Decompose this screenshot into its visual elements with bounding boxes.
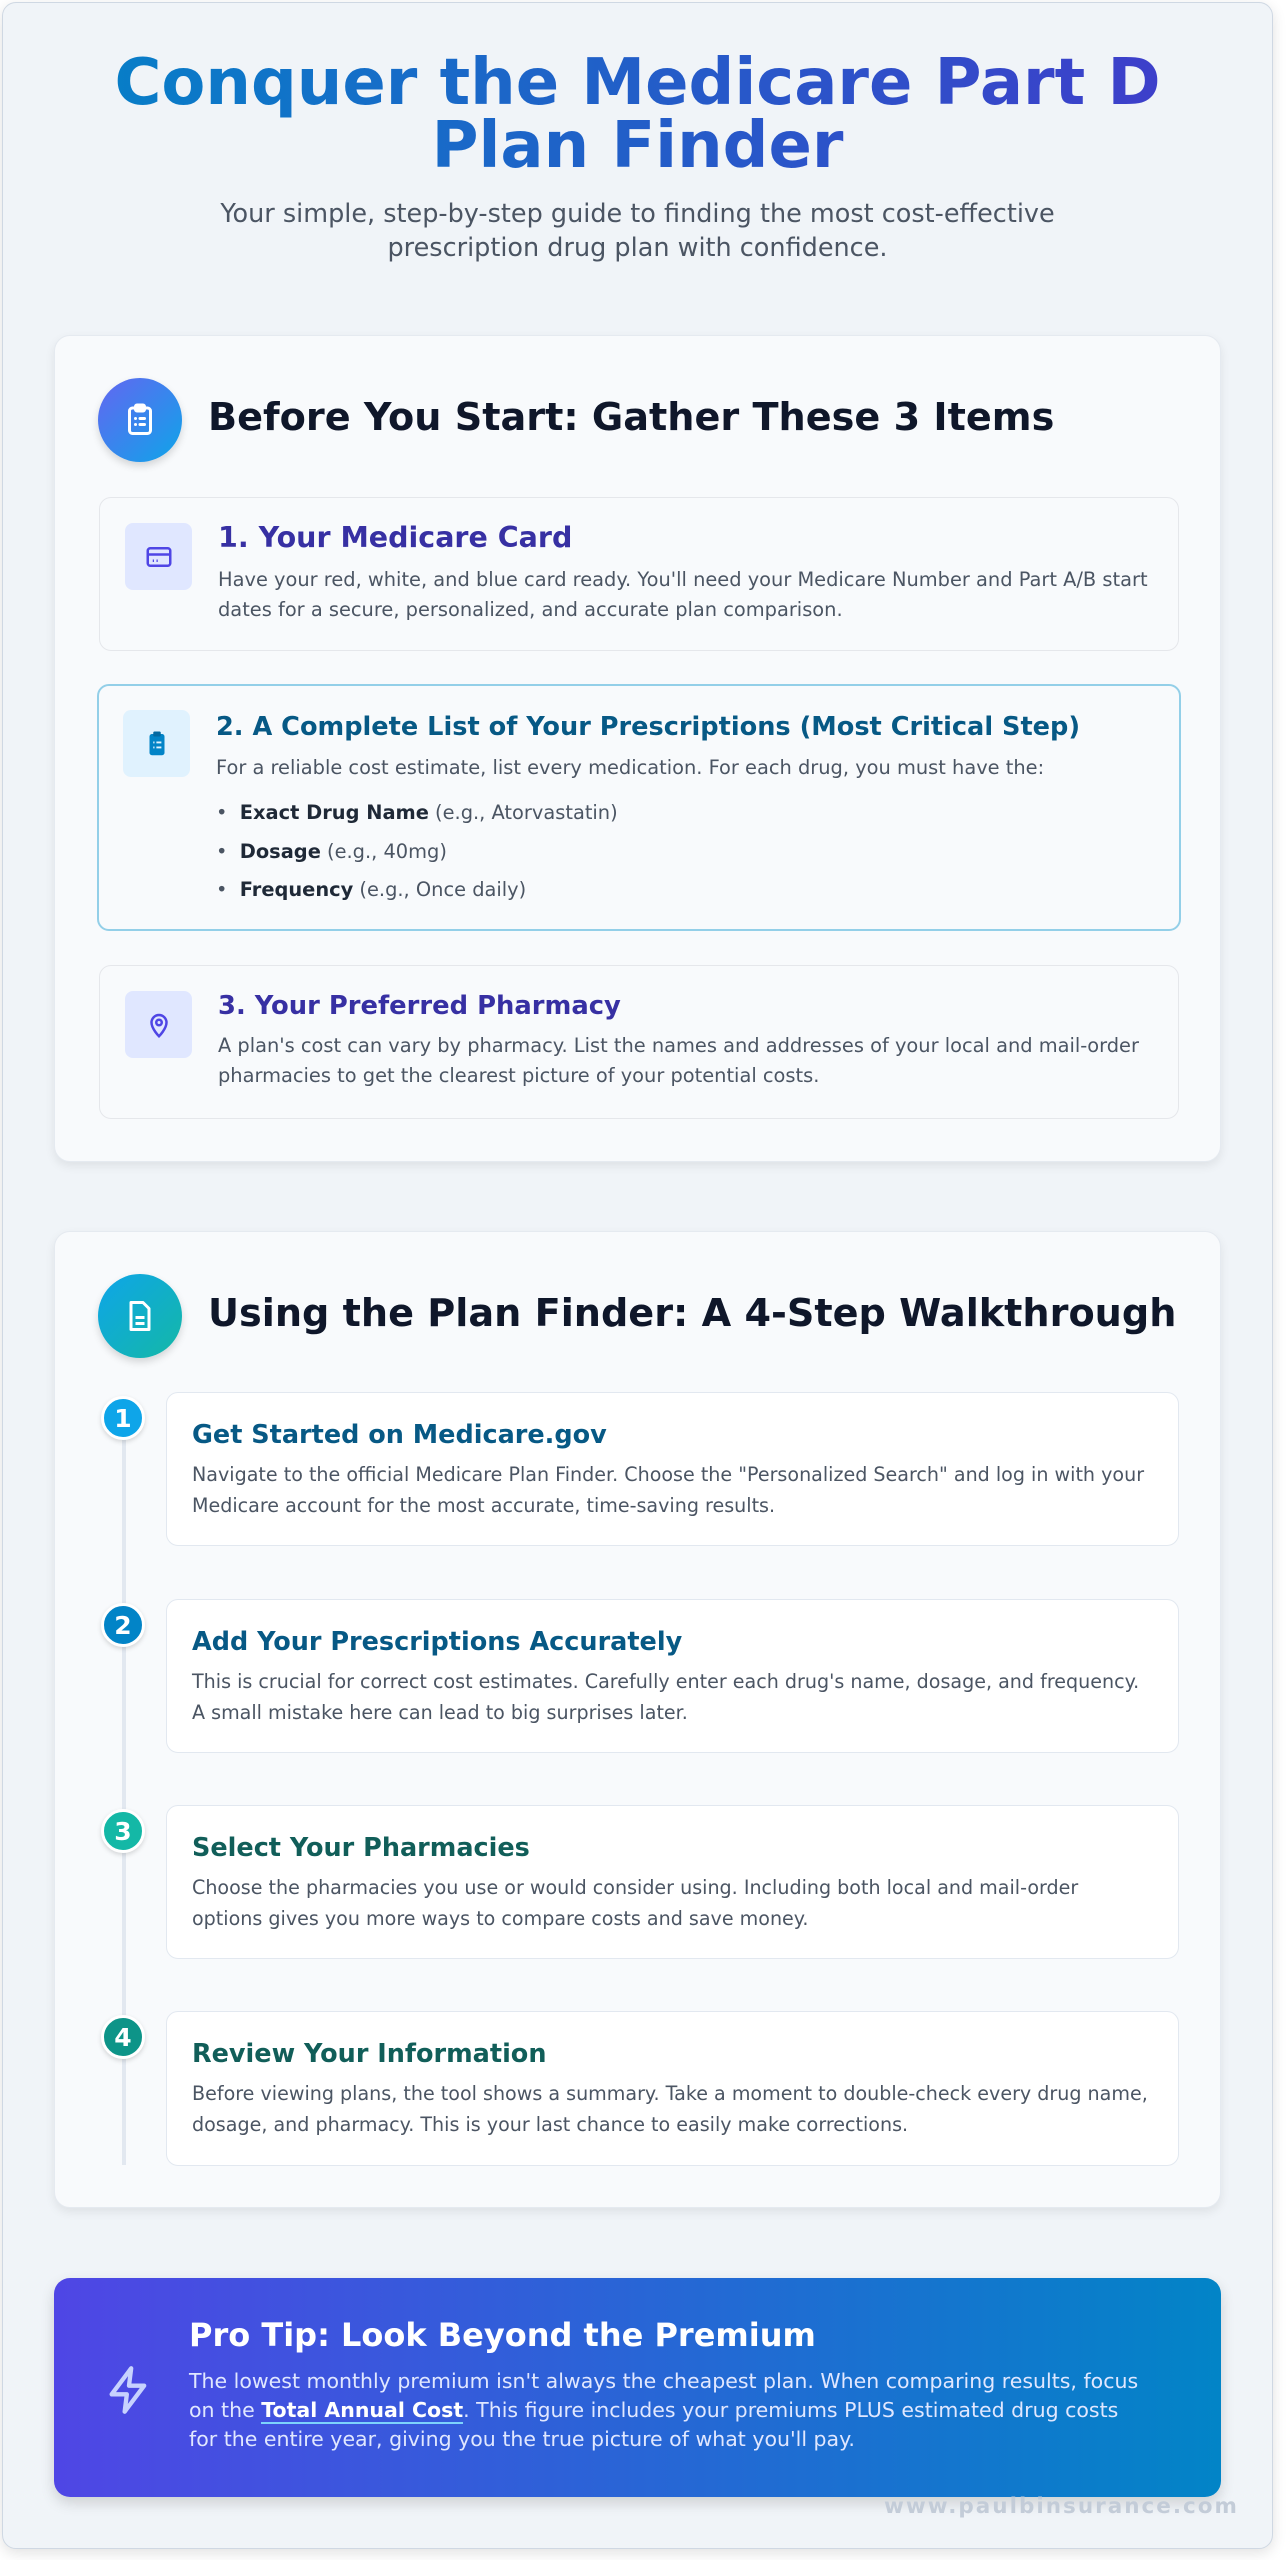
item 1: medicare card: [99, 497, 1179, 651]
item text: Have your red, white, and blue card ready. You'll need your Medicare Number and Part A/B start dates for a secure, personalized, and accurate plan comparison.: [218, 568, 1148, 621]
bullet list: • Exact Drug Name (e.g., Atorvastatin): [216, 801, 618, 824]
number badge 2: [101, 1603, 145, 1647]
step card 1: [166, 1392, 1179, 1546]
item 2: prescriptions: [97, 684, 1181, 931]
panel: 4-step walkthrough: [54, 1231, 1221, 2208]
step 4: [100, 2011, 1179, 2166]
item text: A plan's cost can vary by pharmacy. List the names and addresses of your local and mail‑order pharmacies to get the clearest picture of your potential costs.: [218, 1034, 1139, 1087]
step card 2: Add Your Prescriptions Accurately: [192, 1627, 682, 1657]
tip text: on the Total Annual Cost. This figure includes your premiums PLUS estimated drug costs: [189, 2398, 1118, 2422]
number badge 2: 2: [114, 1610, 132, 1640]
number badge 3: [101, 1809, 145, 1853]
icon: document: [98, 1274, 182, 1358]
step card 4: Review Your Information: [192, 2039, 546, 2069]
step 3: [100, 1805, 1179, 1959]
subtitle: [220, 199, 1055, 263]
step card 3: Select Your Pharmacies: [192, 1833, 530, 1863]
icon: location pin: [125, 991, 192, 1058]
heading: Before You Start: Gather These 3 Items: [208, 396, 1054, 440]
bullet list: • Dosage (e.g., 40mg): [216, 840, 447, 862]
bullet list: • Frequency (e.g., Once daily): [216, 878, 526, 901]
heading: Using the Plan Finder: A 4-Step Walkthrough: [208, 1292, 1176, 1336]
tip title: Pro Tip: Look Beyond the Premium: [189, 2316, 816, 2354]
step card 4: [166, 2011, 1179, 2166]
subtitle: Your simple, step-by-step guide to finding the most cost-effective: [220, 199, 1055, 229]
item title: 1. Your Medicare Card: [218, 521, 572, 554]
title: [0, 52, 1275, 178]
number badge 4: 4: [114, 2022, 132, 2052]
title: Plan Finder: [432, 109, 843, 183]
step card 1: Navigate to the official Medicare Plan Finder. Choose the "Personalized Search" and log in with your Medicare account for the most accurate, time-saving results.: [192, 1463, 1144, 1517]
icon: card: [125, 523, 192, 590]
tip text: for the entire year, giving you the true picture of what you'll pay.: [189, 2427, 855, 2451]
step card 2: [166, 1599, 1179, 1753]
item text: For a reliable cost estimate, list every medication. For each drug, you must have the:: [216, 756, 1044, 779]
watermark: www.paulbinsurance.com: [884, 2494, 1239, 2519]
step 2: [100, 1599, 1179, 1753]
number badge 1: 1: [114, 1404, 132, 1432]
panel: before you start: [54, 335, 1221, 1162]
step card 4: Before viewing plans, the tool shows a summary. Take a moment to double-check every drug name, dosage, and pharmacy. This is your last chance to easily make corrections.: [192, 2082, 1148, 2136]
step card 3: [166, 1805, 1179, 1959]
step 1: [100, 1392, 1179, 1546]
tip text: [188, 2369, 1138, 2451]
item 3: pharmacy: [99, 965, 1179, 1119]
item title: 3. Your Preferred Pharmacy: [218, 991, 621, 1021]
bullet list: [216, 801, 618, 901]
callout: pro tip: [54, 2278, 1221, 2497]
subtitle: prescription drug plan with confidence.: [387, 233, 888, 263]
item title: 2. A Complete List of Your Prescriptions (Most Critical Step): [216, 712, 1080, 742]
title: Conquer the Medicare Part D: [114, 46, 1161, 120]
number badge 1: [101, 1396, 145, 1440]
step card 2: This is crucial for correct cost estimates. Carefully enter each drug's name, dosage, and frequency. A small mistake here can lead to big surprises later.: [192, 1670, 1139, 1724]
step card 3: Choose the pharmacies you use or would consider using. Including both local and mail-order options gives you more ways to compare costs and save money.: [192, 1876, 1078, 1930]
icon: clipboard: [98, 378, 182, 462]
icon: lightning bolt: [110, 2366, 146, 2414]
number badge 3: 3: [114, 1816, 132, 1846]
number badge 4: [101, 2015, 145, 2059]
step card 1: Get Started on Medicare.gov: [192, 1420, 607, 1450]
tip text: The lowest monthly premium isn't always the cheapest plan. When comparing results, focus: [189, 2369, 1138, 2393]
icon: clipboard: [123, 710, 190, 777]
